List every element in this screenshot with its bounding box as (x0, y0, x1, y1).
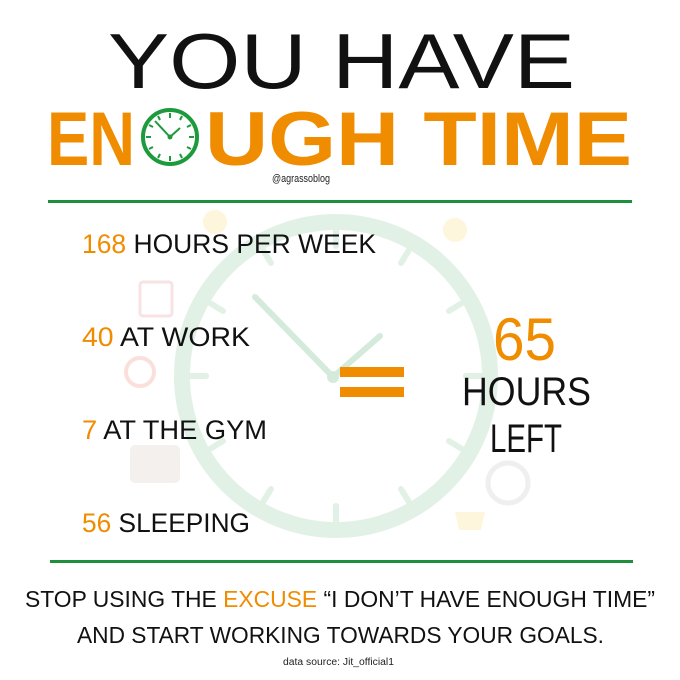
handle: @agrassoblog (272, 173, 330, 185)
title: YOU HAVE: YOU HAVE (108, 17, 575, 105)
result: 65 hours left (462, 306, 591, 461)
data source: data source: Jit_official1 (283, 657, 394, 668)
result: 65 hours left: 65 (493, 306, 556, 373)
equals sign (340, 367, 404, 397)
list: hours: 56 SLEEPING (82, 508, 250, 538)
list: hours: 40 AT WORK (82, 322, 250, 352)
result: 65 hours left: LEFT (490, 417, 562, 461)
title: ENOUGH TIME: EN (47, 97, 135, 182)
list: hours (82, 229, 376, 538)
faint background icons (126, 210, 528, 530)
closing message: AND START WORKING TOWARDS YOUR GOALS. (77, 622, 604, 648)
result: 65 hours left: HOURS (462, 370, 591, 414)
list: hours: 7 AT THE GYM (82, 415, 267, 445)
list: hours: 168 HOURS PER WEEK (82, 229, 376, 259)
title: ENOUGH TIME: UGH TIME (205, 97, 632, 182)
title: ENOUGH TIME (47, 97, 632, 182)
closing message (25, 586, 655, 648)
icon: green clock (143, 110, 197, 164)
closing message: STOP USING THE EXCUSE “I DON’T HAVE ENOUGH TIME” (25, 586, 655, 612)
background clock (182, 222, 490, 530)
